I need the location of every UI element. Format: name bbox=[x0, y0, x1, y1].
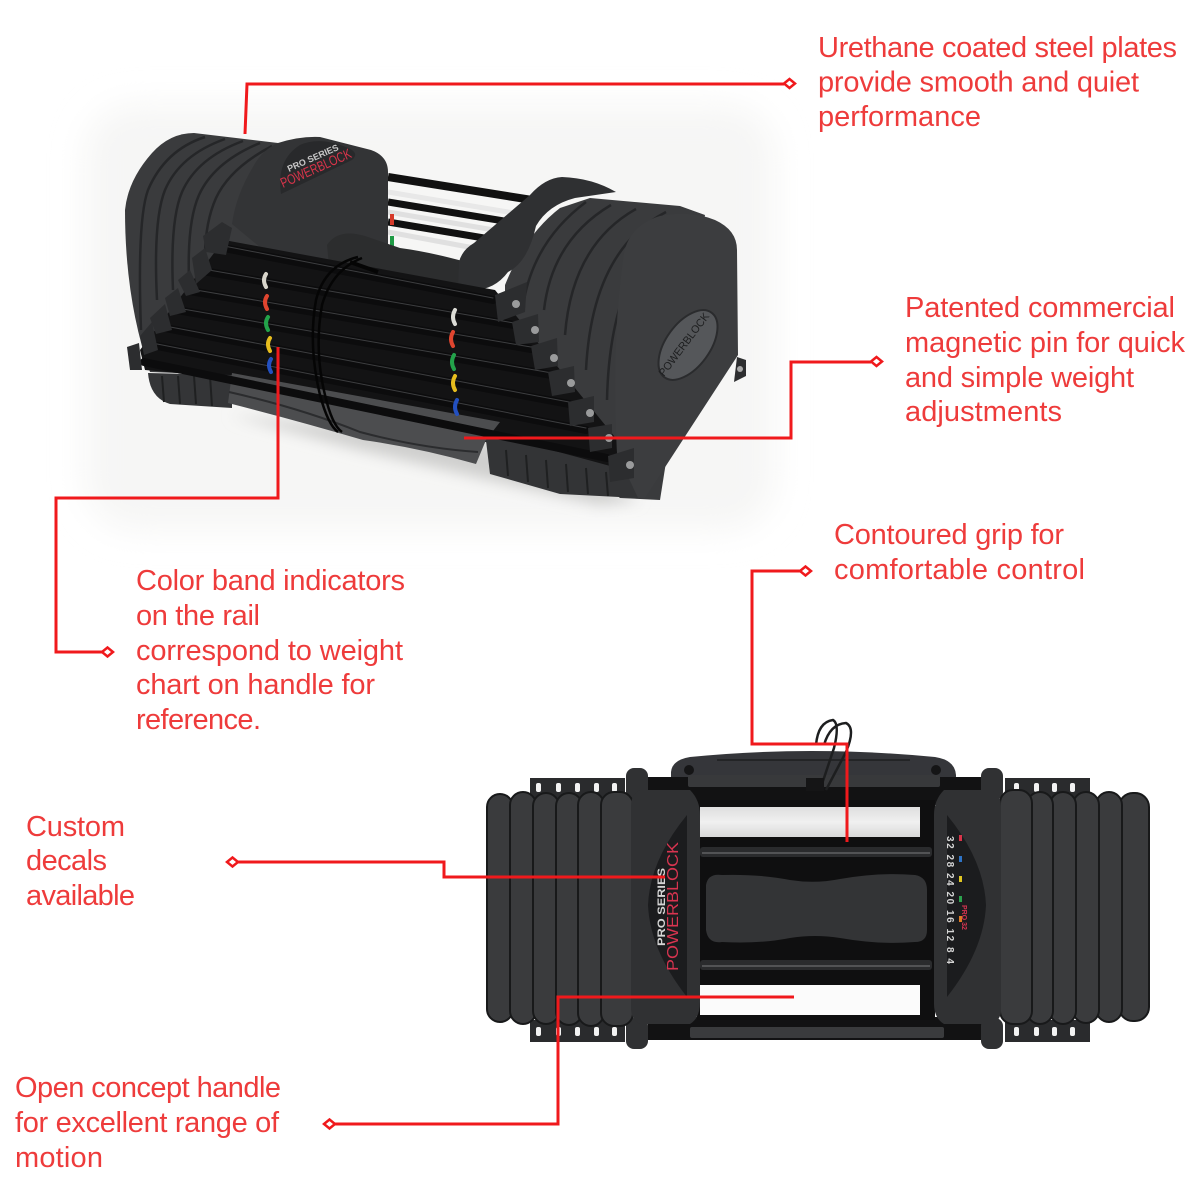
bungee cord bbox=[313, 257, 378, 432]
text block: open handle bbox=[15, 1072, 281, 1174]
text block: open handle: Open concept handle bbox=[15, 1072, 281, 1104]
text block: colour bands: reference. bbox=[136, 704, 261, 736]
icon: diamond end bbox=[324, 1120, 335, 1128]
text block: custom decals: available bbox=[26, 880, 135, 912]
upper rods between blocks bbox=[380, 172, 532, 252]
handle bracket, front bbox=[458, 177, 616, 290]
text block: colour bands bbox=[136, 565, 405, 736]
weight chart text: 32 28 24 20 16 12 8 4 bbox=[944, 836, 955, 964]
floor shadow bbox=[230, 415, 640, 505]
text block: magnetic pin: adjustments bbox=[905, 396, 1062, 428]
icon: diamond end bbox=[102, 648, 113, 656]
right centre block bbox=[934, 790, 1001, 1024]
rail end brackets, rear bbox=[127, 222, 232, 370]
photo backdrop bbox=[85, 105, 775, 530]
leader line: magnetic pin bbox=[464, 357, 882, 438]
icon: diamond end bbox=[784, 79, 795, 88]
rear weight ribs bbox=[125, 133, 300, 375]
text block: urethane plates: performance bbox=[818, 101, 981, 133]
leader line: urethane plates bbox=[245, 79, 795, 134]
text block: magnetic pin: Patented commercial bbox=[905, 292, 1175, 324]
end face with oval badge bbox=[615, 214, 746, 498]
text block: contoured grip: Contoured grip for bbox=[834, 519, 1064, 551]
logo block, rear: POWERBLOCK bbox=[278, 145, 354, 191]
leader line: colour bands bbox=[56, 347, 278, 656]
text block: custom decals bbox=[26, 811, 135, 912]
text block: magnetic pin: and simple weight bbox=[905, 362, 1134, 394]
decal text: PRO SERIES bbox=[656, 868, 668, 946]
text block: colour bands: Color band indicators bbox=[136, 565, 405, 597]
rail end brackets with bolts, front bbox=[495, 282, 634, 482]
text block: custom decals: decals bbox=[26, 845, 107, 877]
text block: colour bands: on the rail bbox=[136, 600, 260, 632]
text block: colour bands: correspond to weight bbox=[136, 635, 403, 667]
grip bbox=[327, 233, 466, 300]
lower weight ribs bbox=[148, 373, 638, 498]
text block: magnetic pin: magnetic pin for quick bbox=[905, 327, 1186, 359]
text block: open handle: motion bbox=[15, 1142, 103, 1174]
end face with oval badge: POWERBLOCK bbox=[657, 310, 713, 379]
text block: urethane plates: Urethane coated steel plates bbox=[818, 32, 1177, 64]
logo block, rear bbox=[232, 137, 388, 268]
leader line: contoured grip bbox=[752, 566, 847, 842]
text block: custom decals: Custom bbox=[26, 811, 125, 843]
open handle area bbox=[697, 800, 935, 1020]
bungee cord bbox=[806, 720, 851, 791]
text block: contoured grip bbox=[834, 519, 1085, 586]
logo text: PRO SERIES bbox=[286, 142, 340, 174]
right centre block: PRO 32 bbox=[960, 905, 967, 930]
left weight ribs bbox=[487, 792, 633, 1026]
product photo: top-view dumbbell bbox=[487, 720, 1149, 1049]
teeth of stepped rails bbox=[530, 778, 1090, 1042]
product photo: angled dumbbell bbox=[125, 133, 746, 505]
base plate bbox=[228, 373, 500, 464]
icon: diamond end bbox=[227, 858, 238, 866]
text block: urethane plates: provide smooth and quiet bbox=[818, 66, 1139, 98]
text block: urethane plates bbox=[818, 32, 1177, 133]
rear plate and rails bbox=[648, 751, 983, 1040]
grip bbox=[706, 874, 927, 943]
text block: open handle: for excellent range of bbox=[15, 1107, 280, 1139]
rail block bbox=[140, 240, 650, 490]
leader line: custom decals bbox=[227, 858, 665, 877]
text block: contoured grip: comfortable control bbox=[834, 554, 1085, 586]
left centre block bbox=[631, 790, 700, 1024]
icon: diamond end bbox=[871, 357, 882, 366]
rails bbox=[144, 246, 607, 458]
right weight ribs bbox=[1000, 790, 1149, 1024]
icon: diamond end bbox=[800, 566, 811, 576]
text block: colour bands: chart on handle for bbox=[136, 669, 375, 701]
leader line: open handle bbox=[324, 997, 794, 1128]
front weight ribs bbox=[505, 198, 705, 500]
colour bands bbox=[264, 274, 457, 414]
left centre block: POWERBLOCK bbox=[665, 842, 682, 971]
text block: magnetic pin bbox=[905, 292, 1186, 428]
end brackets bbox=[626, 768, 1003, 1049]
